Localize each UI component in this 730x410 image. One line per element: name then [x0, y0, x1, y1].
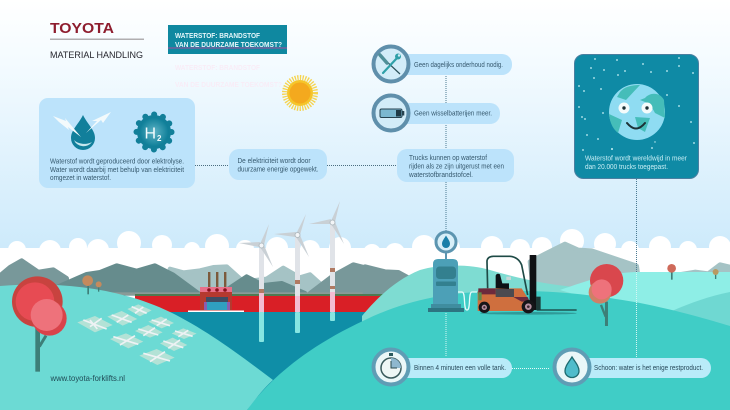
- sun: [284, 78, 316, 108]
- background sky: [0, 0, 730, 250]
- icon: water drop with lightning: [53, 112, 111, 150]
- wind turbine 2: [274, 214, 309, 333]
- small trees right: [667, 264, 719, 280]
- ghost title: WATERSTOF: BRANDSTOF: [175, 63, 260, 72]
- forklift: [478, 255, 577, 315]
- electrolysis text: omgezet in waterstof.: [50, 173, 111, 182]
- wind turbine 3: [309, 201, 344, 321]
- mountains: [0, 261, 365, 300]
- small trees left: [82, 275, 102, 294]
- connector lines: [195, 76, 636, 368]
- callout: no maintenance: Geen dagelijks onderhoud nodig.: [414, 60, 503, 69]
- icon: tools: [374, 46, 408, 82]
- callout: clean water: [554, 350, 711, 384]
- title box: VAN DE DUURZAME TOEKOMST?: [175, 40, 282, 49]
- panel: globe: [574, 54, 698, 178]
- wind turbine 1: [239, 224, 273, 342]
- website url: www.toyota-forklifts.nl: [50, 374, 125, 383]
- callout: clean water: Schoon: water is het enige restproduct.: [594, 363, 703, 372]
- solar panels: [77, 304, 197, 365]
- water: [0, 312, 730, 410]
- electrolysis text: [50, 156, 185, 182]
- title box: [168, 25, 287, 54]
- callout: no battery swap: Geen wisselbatterijen meer.: [414, 108, 492, 118]
- callout: sustainable electricity: [229, 149, 327, 180]
- callout: trucks on hydrogen: rijden als ze zijn uitgerust met een: [409, 162, 504, 170]
- electrolysis text: Waterstof wordt geproduceerd door elektrolyse.: [50, 156, 184, 166]
- electrolysis text: Water wordt daarbij met behulp van elektriciteit: [50, 165, 185, 174]
- icon: hydrogen badge: [136, 114, 172, 150]
- ghost title: VAN DE DUURZAME TOEKOMST?: [175, 80, 282, 89]
- callout: sustainable electricity: duurzame energie opgewekt.: [238, 164, 318, 174]
- globe text: [585, 154, 687, 171]
- icon: clean drop: [554, 350, 590, 384]
- icon: pump drop: [436, 232, 456, 252]
- logo: Toyota Material Handling: TOYOTA: [50, 21, 115, 37]
- icon: hydrogen badge: 2: [157, 134, 162, 143]
- hills right background: [362, 266, 730, 340]
- callout: trucks on hydrogen: Trucks kunnen op waterstof: [409, 153, 488, 162]
- factory chimneys: [208, 272, 226, 289]
- callout: trucks on hydrogen: waterstofbrandstofcel.: [408, 170, 473, 179]
- factory building: [188, 287, 244, 312]
- callout: no battery swap: [374, 96, 500, 130]
- logo: Toyota Material Handling: MATERIAL HANDLING: [50, 50, 143, 60]
- callout: four minutes: Binnen 4 minuten een volle tank.: [414, 363, 506, 372]
- stars: [578, 57, 695, 151]
- logo: Toyota Material Handling: [50, 21, 144, 60]
- panel: electrolysis: [39, 98, 195, 188]
- tree right: [589, 264, 623, 326]
- globe text: dan 20.000 trucks toegepast.: [585, 162, 668, 171]
- icon: stopwatch: [374, 350, 408, 384]
- clouds: [0, 229, 730, 308]
- hill front left: [0, 284, 273, 410]
- callout: trucks on hydrogen: [397, 149, 514, 182]
- callout: sustainable electricity: De elektriciteit wordt door: [238, 156, 311, 165]
- red strip with factory: [135, 272, 395, 312]
- icon: smiling earth: [609, 84, 665, 140]
- title box: WATERSTOF: BRANDSTOF: [175, 31, 260, 40]
- icon: battery: [374, 96, 408, 130]
- hill front right: [247, 291, 730, 410]
- tree large left: [12, 276, 67, 372]
- hydrogen pump: [428, 232, 477, 312]
- ghost title: [175, 63, 282, 89]
- mountains right: [365, 244, 730, 297]
- callout: four minutes: [374, 350, 512, 384]
- globe text: Waterstof wordt wereldwijd in meer: [585, 154, 687, 162]
- icon: hydrogen badge: H: [144, 126, 156, 142]
- callout: no maintenance: [374, 46, 512, 82]
